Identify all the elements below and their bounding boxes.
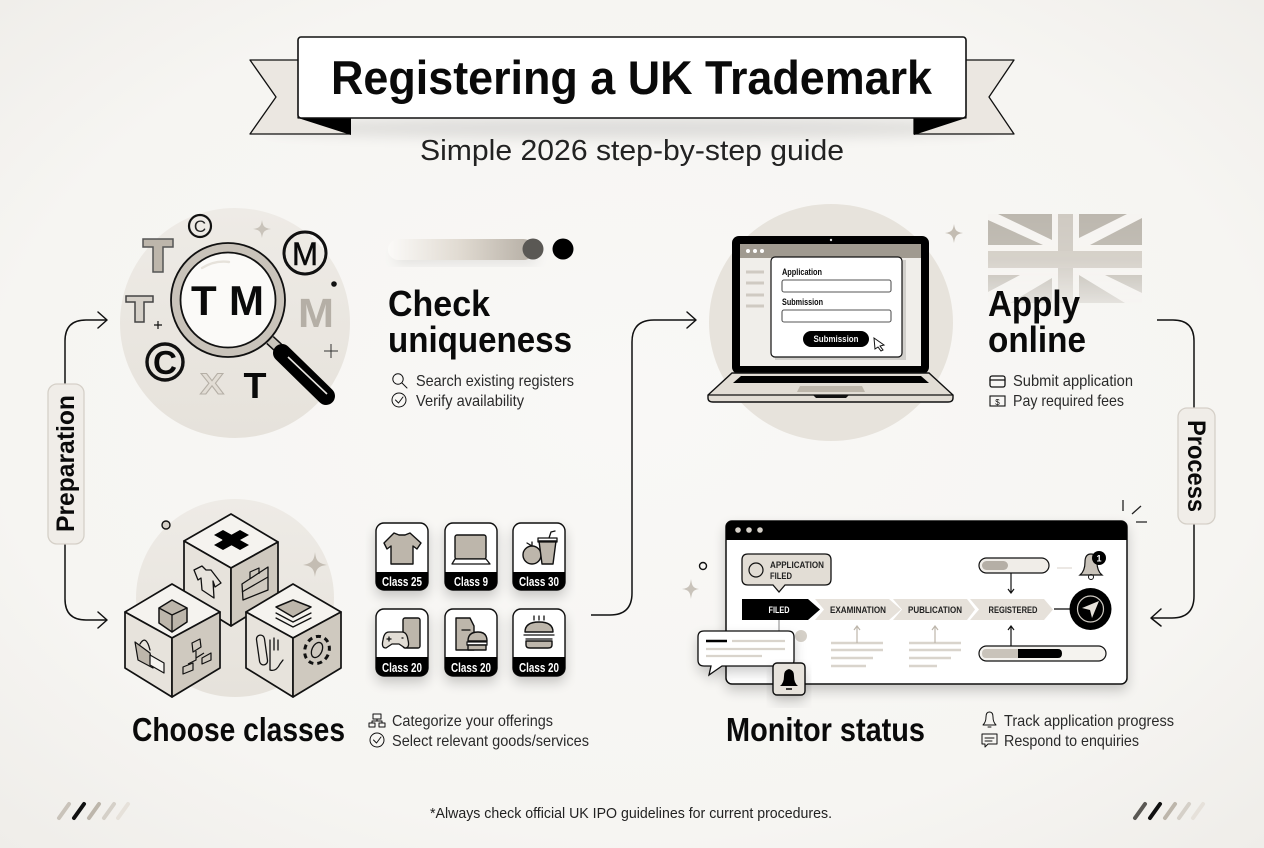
heading: Monitor status [726, 711, 925, 748]
callout: application filed: FILED [770, 571, 792, 581]
tile: Class 20 food [445, 609, 497, 676]
connector and dot [779, 620, 807, 642]
title banner: Registering a UK Trademark [331, 51, 933, 104]
cube: right [246, 584, 341, 697]
progress pill top [979, 558, 1072, 593]
chat bubble [698, 631, 794, 675]
decorative slashes left [59, 804, 128, 818]
status chevrons: PUBLICATION [908, 605, 962, 615]
symbols around magnifier: X [200, 368, 224, 401]
class tiles [376, 523, 565, 676]
tile: Class 9: Class 9 [454, 575, 488, 589]
symbols around magnifier: M [298, 290, 334, 336]
symbols around magnifier: T [244, 365, 266, 406]
navigation badge [1054, 588, 1112, 630]
notification bell [1080, 551, 1106, 580]
list: Search existing registers [416, 373, 574, 390]
callout: application filed [742, 554, 831, 592]
subtitle: Simple 2026 step-by-step guide [420, 135, 844, 167]
panel: monitor status [682, 500, 1174, 750]
tile: Class 25 [376, 523, 428, 590]
highlight marks [1123, 500, 1147, 522]
symbols around magnifier [126, 215, 338, 406]
tile: Class 30: Class 30 [519, 575, 559, 589]
tile: Class 30 [513, 523, 565, 590]
symbols around magnifier: C [153, 344, 177, 381]
progress bar [388, 238, 574, 262]
form dialog: Application [782, 267, 822, 277]
illustration: magnifier with trademark symbols [120, 208, 350, 438]
cube: left [125, 584, 220, 697]
list: Pay required fees [1013, 393, 1124, 410]
bell tile [773, 663, 805, 695]
magnifying glass: T M [191, 277, 264, 324]
detail lines [831, 626, 961, 666]
list: $ [995, 398, 1000, 407]
form dialog: Submission [814, 334, 858, 344]
heading: Check [388, 283, 491, 324]
footnote: *Always check official UK IPO guidelines for current procedures. [430, 805, 832, 822]
label: Preparation: Preparation [52, 395, 80, 532]
cube: back [184, 514, 278, 626]
list [982, 712, 1174, 750]
list: Categorize your offerings [392, 713, 553, 730]
heading: Apply [988, 283, 1080, 324]
label: Process: Process [1182, 420, 1210, 512]
label: Process [1178, 408, 1215, 524]
tile: Class 20 game: Class 20 [382, 661, 422, 675]
laptop base [708, 373, 953, 402]
tile: Class 20 game [376, 609, 428, 676]
symbols around magnifier: M [292, 236, 318, 272]
tile: Class 20 burger: Class 20 [519, 661, 559, 675]
heading: uniqueness [388, 319, 572, 360]
heading: online [988, 319, 1086, 360]
list [990, 373, 1133, 410]
list: Respond to enquiries [1004, 733, 1139, 750]
status chevrons: EXAMINATION [830, 605, 886, 615]
illustration: laptop [708, 204, 963, 441]
callout: application filed: APPLICATION [770, 560, 824, 570]
panel: choose classes [125, 499, 589, 750]
label: Preparation [48, 384, 84, 544]
tile: Class 20 burger [513, 609, 565, 676]
progress pill bottom [979, 626, 1106, 661]
tile: Class 25: Class 25 [382, 575, 422, 589]
panel: check uniqueness [120, 208, 574, 438]
arrow: process loop [1151, 320, 1194, 626]
notification bell: 1 [1096, 554, 1102, 564]
list: Verify availability [416, 393, 524, 410]
panel: apply online [708, 204, 1142, 441]
illustration: cubes [125, 499, 341, 697]
symbols around magnifier: C [194, 217, 206, 236]
magnifying glass [171, 243, 327, 396]
decorations [682, 562, 706, 599]
status chevrons: FILED [768, 605, 790, 615]
decorative slashes right [1135, 804, 1203, 818]
arrow: preparation loop [65, 312, 107, 628]
list: Track application progress [1004, 713, 1174, 730]
list: Select relevant goods/services [392, 733, 589, 750]
title banner [250, 37, 1014, 138]
status chevrons [742, 599, 1053, 620]
flag [988, 214, 1142, 304]
tile: Class 20 food: Class 20 [451, 661, 491, 675]
heading: Choose classes [132, 711, 345, 748]
arrow: classes to apply [591, 312, 696, 615]
form dialog: Submission [782, 297, 823, 307]
list [369, 713, 589, 750]
browser window [726, 521, 1127, 684]
tile: Class 9 [445, 523, 497, 590]
form dialog [771, 257, 902, 357]
banner ribbon tails [250, 60, 1014, 135]
laptop screen [732, 236, 929, 374]
status chevrons: REGISTERED [988, 605, 1038, 615]
list [392, 373, 574, 410]
list: Submit application [1013, 373, 1133, 390]
